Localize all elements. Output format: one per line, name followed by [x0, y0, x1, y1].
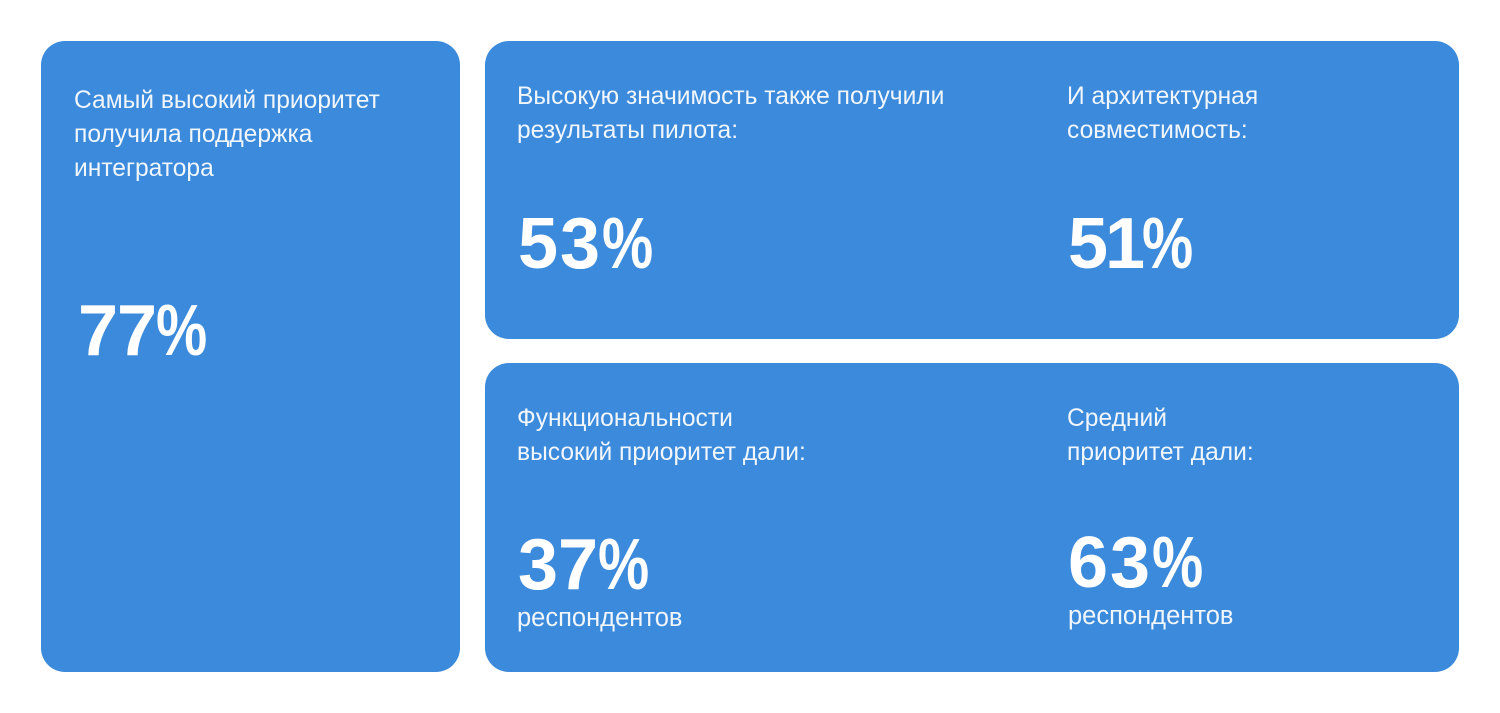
number: 77%: 77	[78, 291, 156, 371]
text: architectural compatibility: совместимость:	[1067, 117, 1248, 144]
number: 63%: 63	[1068, 523, 1152, 603]
number: 53%	[518, 204, 653, 284]
number: 51%	[1068, 204, 1193, 284]
panel: pilot results and architecture	[485, 41, 1459, 339]
text: functionality: Функциональности	[517, 405, 733, 432]
number: 37%: %	[598, 525, 649, 605]
number: 77%	[78, 291, 207, 371]
number: 51%: %	[1142, 204, 1193, 284]
text: highest priority: Самый высокий приоритет	[74, 87, 380, 114]
text: medium priority: приоритет дали:	[1067, 439, 1254, 466]
number: 37%	[518, 525, 649, 605]
caption: respondents right: респондентов	[1068, 602, 1233, 630]
number: 63%	[1068, 523, 1203, 603]
text: architectural compatibility	[1067, 83, 1258, 144]
text: pilot results: результаты пилота:	[517, 117, 738, 144]
number: 63%: %	[1152, 523, 1203, 603]
number: 77%: %	[156, 291, 207, 371]
number: 37%: 37	[518, 525, 598, 605]
panel: integrator support	[41, 41, 460, 672]
text: pilot results	[517, 83, 944, 144]
text: highest priority: получила поддержка	[74, 121, 312, 148]
number: 53%: 53	[518, 204, 602, 284]
number: 51%: 51	[1068, 204, 1142, 284]
text: medium priority	[1067, 405, 1254, 466]
text: medium priority: Средний	[1067, 405, 1167, 432]
text: highest priority: интегратора	[74, 155, 214, 182]
text: functionality	[517, 405, 806, 466]
text: functionality: высокий приоритет дали:	[517, 439, 806, 466]
caption: respondents left: респондентов	[517, 604, 682, 632]
text: pilot results: Высокую значимость также получили	[517, 83, 944, 110]
text: highest priority	[74, 87, 380, 182]
text: architectural compatibility: И архитектурная	[1067, 83, 1258, 110]
panel: functionality and medium priority	[485, 363, 1459, 672]
number: 53%: %	[602, 204, 653, 284]
